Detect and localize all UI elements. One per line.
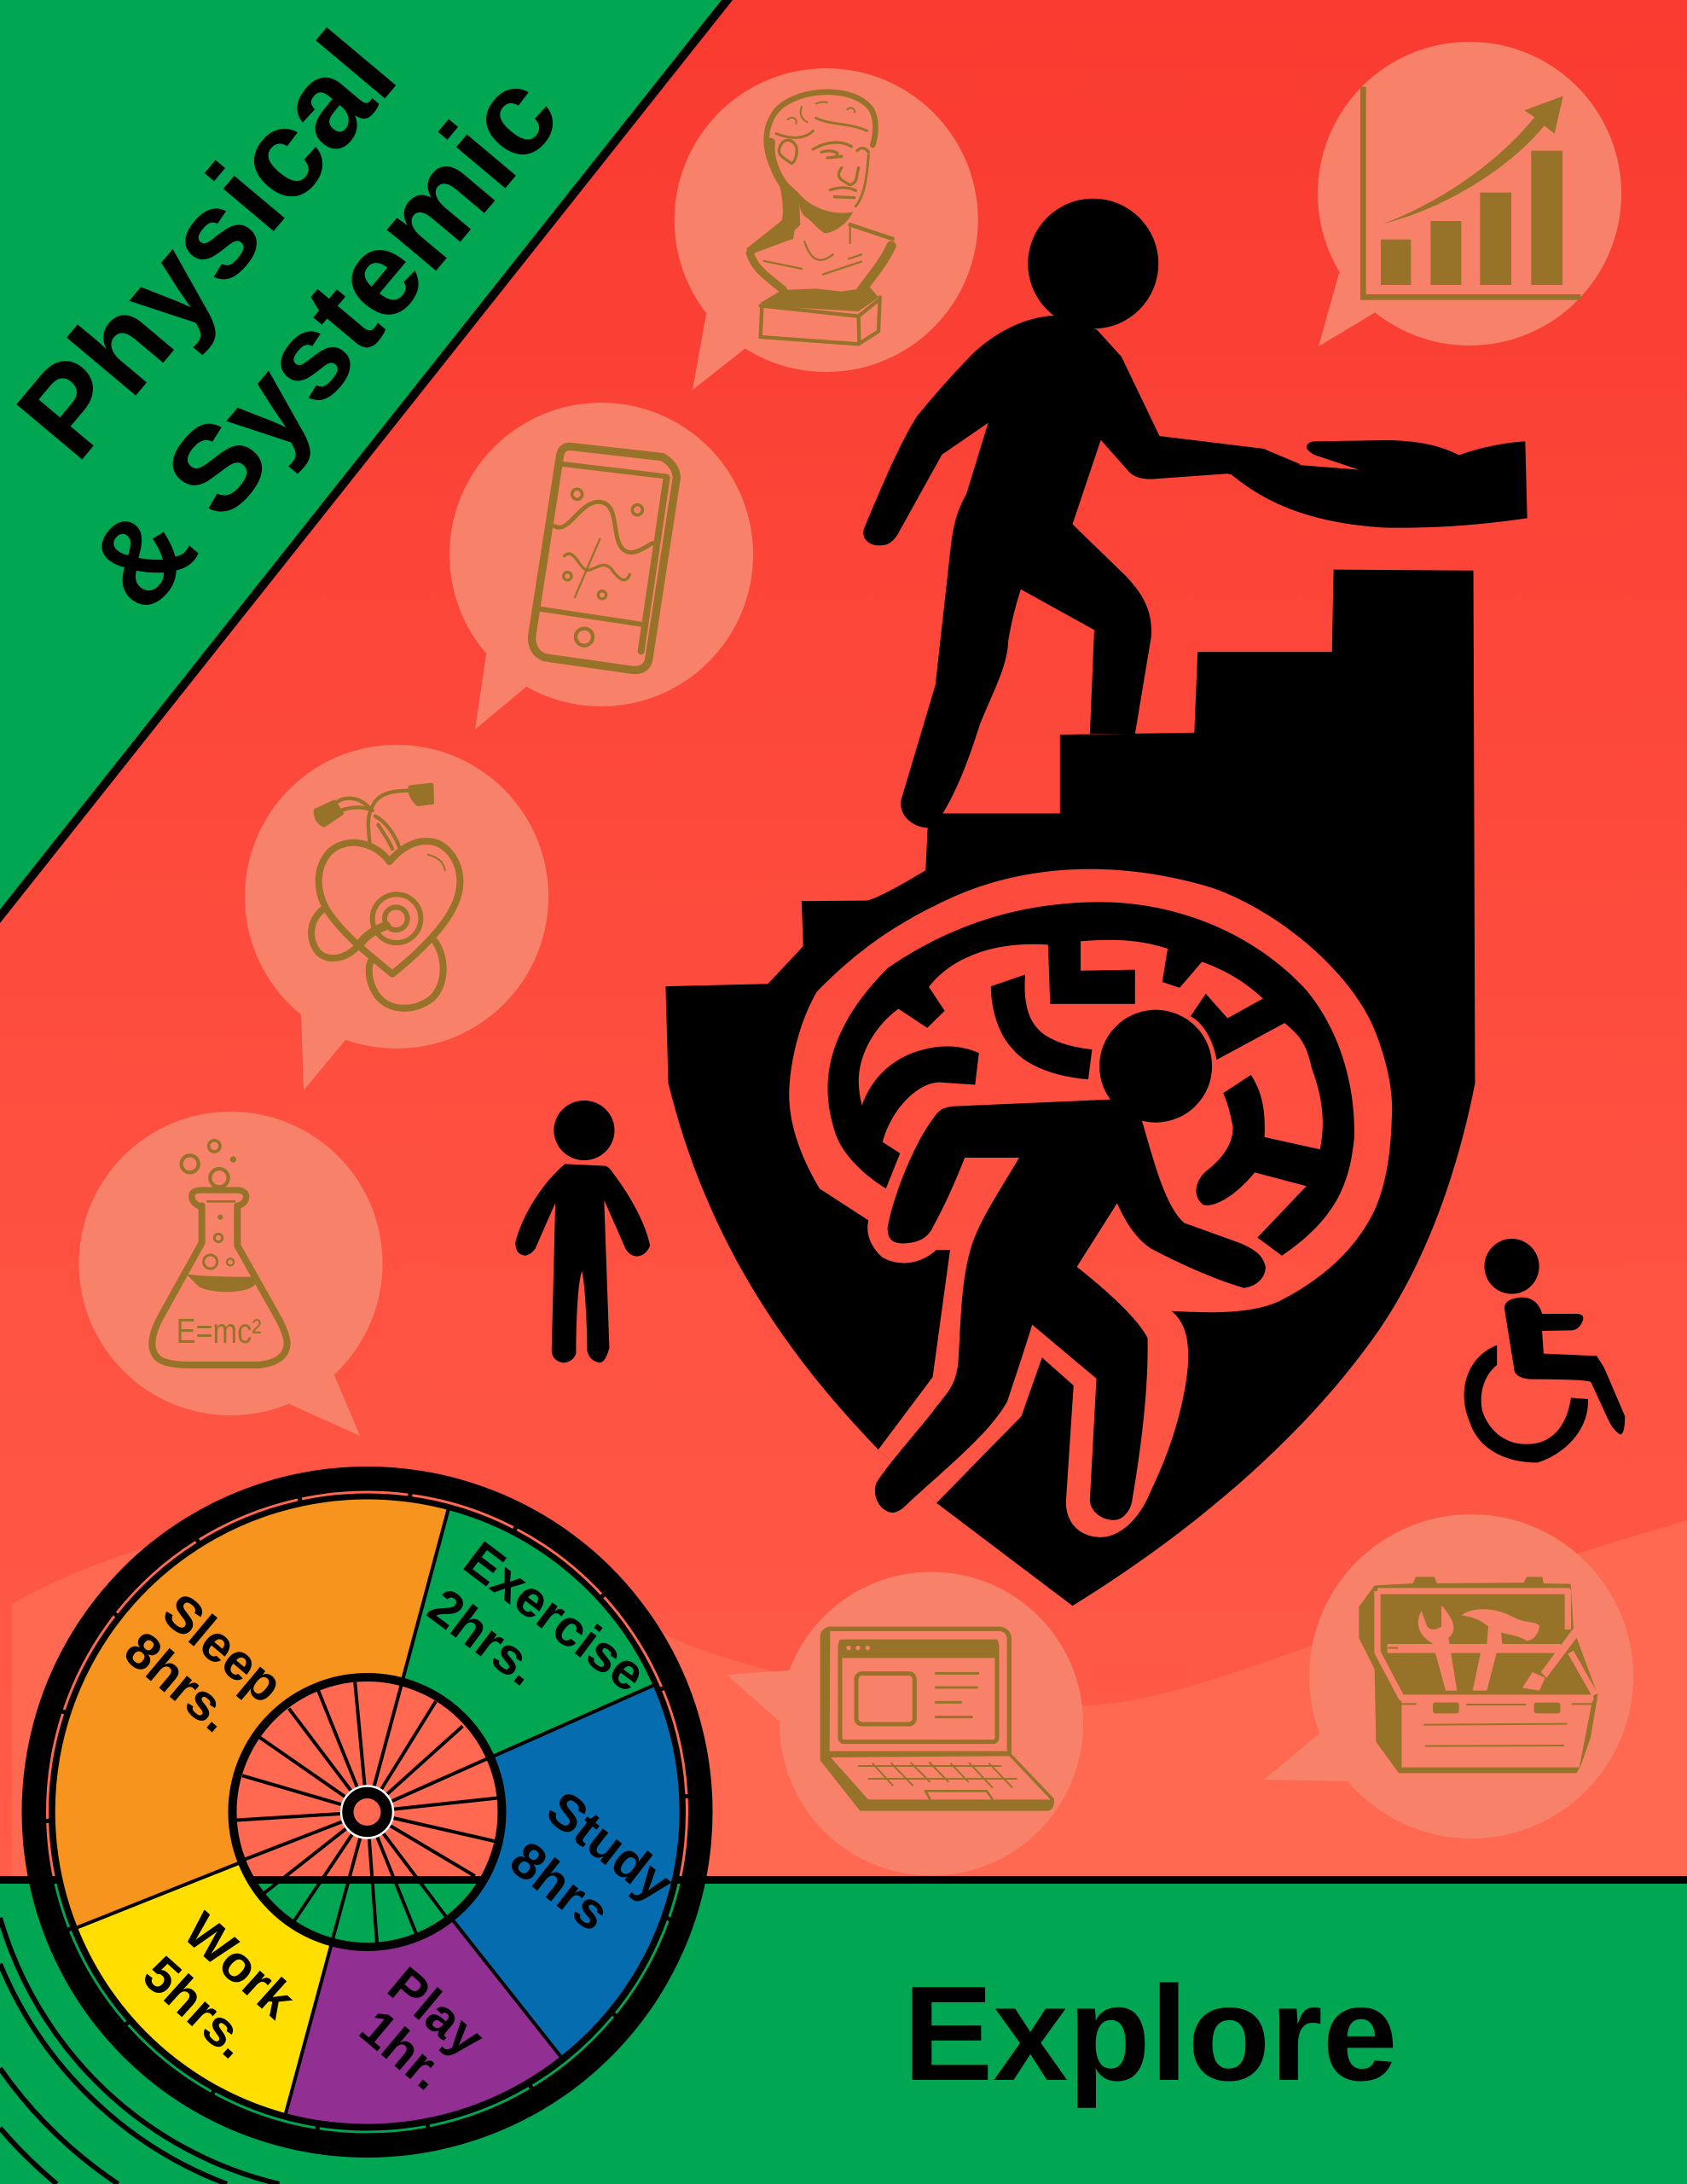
icon: wheelchair user <box>1464 1239 1625 1462</box>
label: sleep 8hrs: 8hrs. <box>114 1621 245 1743</box>
tyre <box>22 1467 713 2158</box>
label: work 5hrs <box>132 1902 306 2070</box>
speech bubble: bust <box>675 68 978 390</box>
slice: study <box>367 1685 681 2058</box>
label: work 5hrs: Work <box>173 1902 306 2030</box>
icon: conical flask <box>152 1141 287 1365</box>
icon: smartphone <box>532 446 676 670</box>
speech bubble: flask <box>78 1112 382 1436</box>
label: play 1hr: 1hr. <box>350 1999 455 2101</box>
label: exercise 2hrs: 2hrs. <box>418 1577 550 1697</box>
speech bubble: growth chart <box>1318 42 1621 346</box>
upper figure climbing stairs <box>863 199 1301 828</box>
formula: E=mc² <box>177 1311 262 1350</box>
icon: bar chart with rising arrow <box>1360 87 1580 300</box>
bottom green band <box>0 1876 1687 2184</box>
slice: work <box>76 1812 367 2115</box>
open hand reaching down <box>1228 440 1528 528</box>
speech bubble: laptop <box>727 1571 1083 1875</box>
footer heading: Explore: Explore <box>903 1959 1398 2109</box>
label: study 8hrs: 8hrs <box>500 1830 620 1942</box>
ripple arcs <box>0 1918 280 2184</box>
slice: exercise <box>367 1508 655 1812</box>
label: exercise 2hrs: Exercise <box>454 1531 657 1703</box>
top-left green corner banner <box>0 0 733 923</box>
lower figure carrying the brain <box>875 1010 1266 1520</box>
label: work 5hrs: 5hrs. <box>132 1945 262 2070</box>
icon: standing person <box>515 1101 650 1362</box>
slice: sleep <box>54 1497 449 1928</box>
label: sleep 8hrs: Sleep <box>153 1583 293 1714</box>
label: sleep 8hrs <box>114 1583 293 1743</box>
shield with stairs <box>665 570 1475 1606</box>
title: Physical & Systemic: & Systemic <box>61 47 585 635</box>
title: Physical & Systemic: Physical <box>0 6 422 483</box>
hub <box>341 1786 393 1838</box>
label: study 8hrs: Study <box>536 1780 684 1913</box>
hub area with spokes <box>237 1682 498 1943</box>
slice: play <box>285 1812 561 2126</box>
speech bubble: heart stethoscope <box>245 745 548 1090</box>
label: play 1hr: Play <box>378 1956 496 2068</box>
icon: toolbox <box>1359 1577 1597 1773</box>
speech bubble: toolbox <box>1264 1514 1633 1838</box>
icon: heart with stethoscope <box>311 785 460 1008</box>
bicycle wheel pie chart: daily hours <box>22 1467 713 2158</box>
brain halo <box>789 869 1392 1537</box>
brain folds <box>827 902 1354 1256</box>
label: study 8hrs <box>500 1780 684 1942</box>
icon: classical bust <box>746 92 893 344</box>
label: play 1hr <box>350 1956 496 2101</box>
icon: laptop <box>820 1627 1054 1811</box>
speech bubble: phone <box>449 403 753 729</box>
